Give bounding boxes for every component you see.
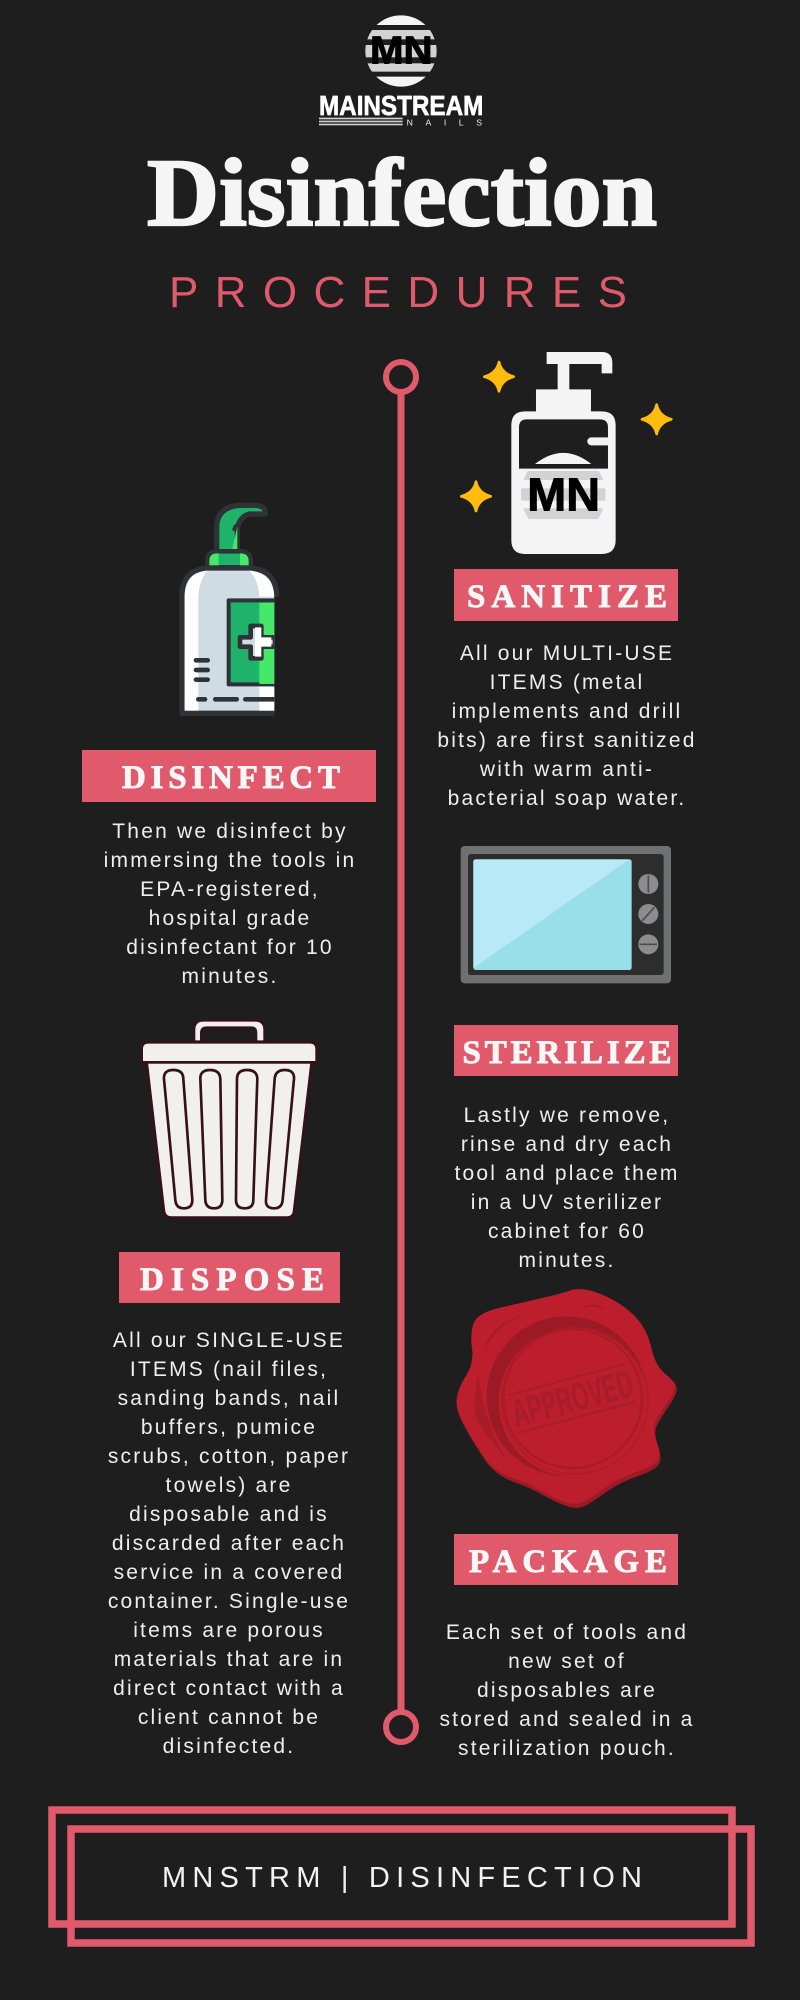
text: sanitize: bacterial soap water. [448,787,686,810]
banner: disinfect: DISINFECT [122,760,340,796]
text: package: stored and sealed in a [439,1708,695,1731]
dials [638,874,658,954]
text: dispose: All our SINGLE-USE [113,1329,345,1352]
text: package: Each set of tools and [446,1621,688,1644]
text: sterilize: Lastly we remove, [464,1104,670,1127]
icon: trash can [142,1020,317,1218]
text: sterilize: cabinet for 60 [488,1220,646,1243]
text: dispose: discarded after each [112,1532,346,1555]
text: dispose: scrubs, cotton, paper [108,1445,350,1468]
icon: approved wax seal [455,1285,677,1508]
title: Disinfection [147,139,657,246]
banner: sanitize: SANITIZE [467,579,667,615]
text: disinfect: Then we disinfect by [112,820,348,843]
banner: dispose [119,1252,340,1303]
text: sanitize: with warm anti- [479,758,654,781]
text: disinfect: hospital grade [149,907,311,930]
icon: soap bottle [461,352,671,554]
text: sanitize: bits) are first sanitized [437,729,697,752]
text: dispose: ITEMS (nail files, [130,1358,328,1381]
text: sanitize [437,642,697,810]
icon: disinfectant bottle [182,505,277,713]
text: dispose: disposable and is [129,1503,329,1526]
banner: package: PACKAGE [469,1544,667,1580]
footer frame [52,1810,751,1943]
text: dispose: materials that are in [114,1648,344,1671]
text: sterilize: in a UV sterilizer [471,1191,663,1214]
text: dispose: buffers, pumice [141,1416,317,1439]
banner: sterilize [454,1025,678,1076]
text: sterilize [454,1104,680,1272]
banner: sanitize [454,569,678,621]
banner: disinfect [82,750,376,802]
text: dispose [108,1329,350,1758]
text: disinfect: immersing the tools in [104,849,356,872]
logo: Mainstream Nails [319,13,483,127]
banner: dispose: DISPOSE [140,1262,324,1298]
icon: soap bottle: MN [527,469,600,521]
text: dispose: container. Single-use [108,1590,350,1613]
seal text [507,1362,638,1436]
text: dispose: service in a covered [114,1561,344,1584]
text: sanitize: ITEMS (metal [490,671,644,694]
icon: UV sterilizer [461,846,671,983]
text: disinfect: disinfectant for 10 [126,936,334,959]
timeline [386,362,416,1742]
text: package: sterilization pouch. [458,1737,676,1760]
text: dispose: direct contact with a [113,1677,345,1700]
text: package: disposables are [477,1679,657,1702]
text: dispose: towels) are [166,1474,292,1497]
logo: Mainstream Nails: MN [370,28,433,72]
sparkles [461,362,671,511]
text: sanitize: All our MULTI-USE [460,642,674,665]
banner: package [454,1534,678,1585]
text: sterilize: minutes. [519,1249,615,1272]
footer text: MNSTRM | DISINFECTION [162,1862,642,1894]
text: disinfect [104,820,356,988]
text: sanitize: implements and drill [452,700,682,723]
text: dispose: sanding bands, nail [118,1387,340,1410]
text: disinfect: minutes. [182,965,278,988]
subtitle: PROCEDURES [169,268,627,317]
text: dispose: disinfected. [163,1735,295,1758]
text: disinfect: EPA-registered, [140,878,320,901]
logo: Mainstream Nails: MAINSTREAM [319,90,483,121]
text: dispose: items are porous [133,1619,325,1642]
text: package [439,1621,695,1760]
banner: sterilize: STERILIZE [462,1035,672,1071]
text: sterilize: rinse and dry each [461,1133,673,1156]
logo: Mainstream Nails: NAILS [407,117,482,127]
seal text: APPROVED [507,1362,638,1436]
text: dispose: client cannot be [138,1706,320,1729]
text: package: new set of [508,1650,626,1673]
text: sterilize: tool and place them [454,1162,680,1185]
